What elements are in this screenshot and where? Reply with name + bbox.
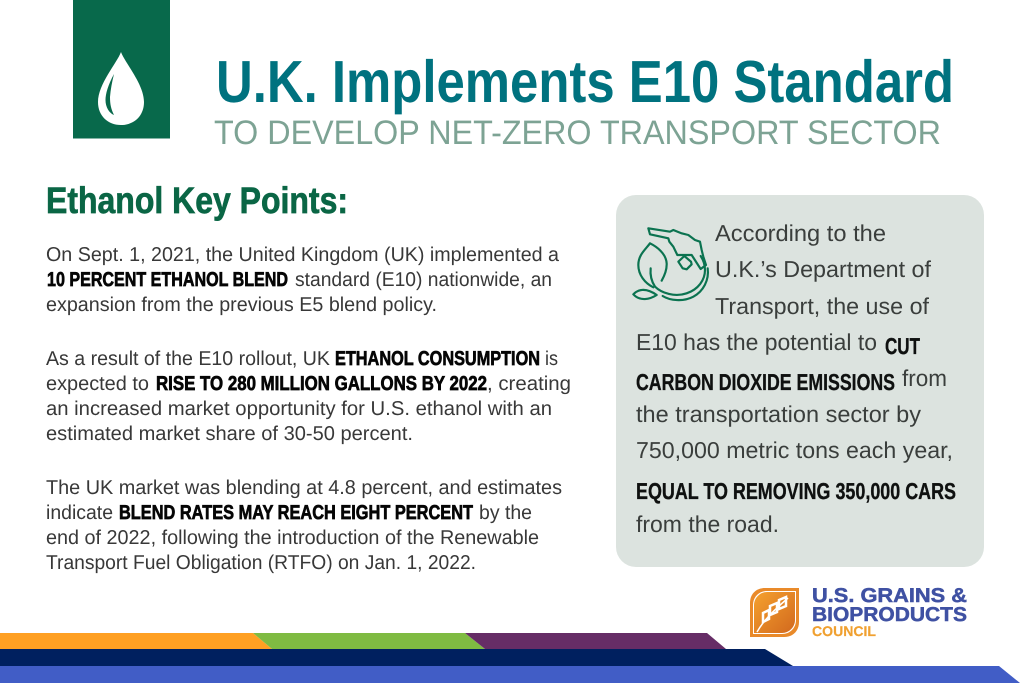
- text block: paragraph 3: by the: [479, 502, 532, 524]
- logo: U.S. Grains & Bioproducts Council: COUNCIL: [812, 623, 876, 639]
- text block: paragraph 2: expected to: [46, 373, 149, 395]
- text block: paragraph 2: ETHANOL CONSUMPTION: [335, 348, 540, 370]
- callout text: from the road.: [636, 511, 779, 537]
- callout text: E10 has the potential to: [636, 329, 877, 355]
- text block: paragraph 3: The UK market was blending at 4.8 percent, and estimates: [46, 477, 562, 499]
- heading: Ethanol Key Points: Ethanol Key Points:: [46, 180, 348, 221]
- panel: E10 emissions callout: [616, 195, 984, 567]
- callout text: CUT: [885, 333, 920, 359]
- text block: paragraph 2: [46, 348, 571, 445]
- callout text: According to the: [715, 220, 886, 246]
- callout text: from: [902, 365, 947, 391]
- text block: paragraph 2: RISE TO 280 MILLION GALLONS BY 2022: [156, 373, 487, 395]
- callout text: the transportation sector by: [636, 401, 921, 427]
- text block: paragraph 2: an increased market opportunity for U.S. ethanol with an: [46, 398, 552, 420]
- callout text: CARBON DIOXIDE EMISSIONS: [636, 369, 895, 395]
- text block: paragraph 2: is: [545, 348, 558, 370]
- text block: paragraph 2: As a result of the E10 rollout, UK: [46, 348, 331, 370]
- text block: paragraph 3: BLEND RATES MAY REACH EIGHT PERCENT: [119, 502, 473, 524]
- logo: U.S. Grains & Bioproducts Council: BIOPRODUCTS: [812, 604, 967, 626]
- footer color bands: [0, 633, 1020, 683]
- callout text: Transport, the use of: [715, 293, 930, 319]
- icon: fuel nozzle with leaf: [633, 228, 708, 300]
- header icon: green block with water drop: [73, 0, 170, 138]
- text block: paragraph 3: end of 2022, following the introduction of the Renewable: [46, 527, 539, 549]
- logo: U.S. Grains & Bioproducts Council: U.S. GRAINS &: [812, 585, 967, 607]
- text block: paragraph 1: 10 PERCENT ETHANOL BLEND: [47, 269, 288, 291]
- subtitle: TO DEVELOP NET-ZERO TRANSPORT SECTOR: [214, 114, 941, 152]
- text block: paragraph 3: indicate: [46, 502, 113, 524]
- text block: paragraph 1: [46, 244, 560, 316]
- text block: paragraph 1: expansion from the previous E5 blend policy.: [46, 294, 437, 316]
- callout text: [636, 220, 956, 537]
- callout text: U.K.’s Department of: [715, 256, 932, 282]
- text block: paragraph 2: estimated market share of 30-50 percent.: [46, 423, 413, 445]
- text block: paragraph 1: On Sept. 1, 2021, the United Kingdom (UK) implemented a: [46, 244, 560, 266]
- callout text: 750,000 metric tons each year,: [636, 437, 953, 463]
- logo: U.S. Grains & Bioproducts Council: [750, 585, 967, 639]
- text block: paragraph 2: , creating: [487, 373, 571, 395]
- text block: paragraph 1: standard (E10) nationwide, an: [295, 269, 552, 291]
- text block: paragraph 3: [46, 477, 562, 574]
- text block: paragraph 3: Transport Fuel Obligation (RTFO) on Jan. 1, 2022.: [46, 552, 476, 574]
